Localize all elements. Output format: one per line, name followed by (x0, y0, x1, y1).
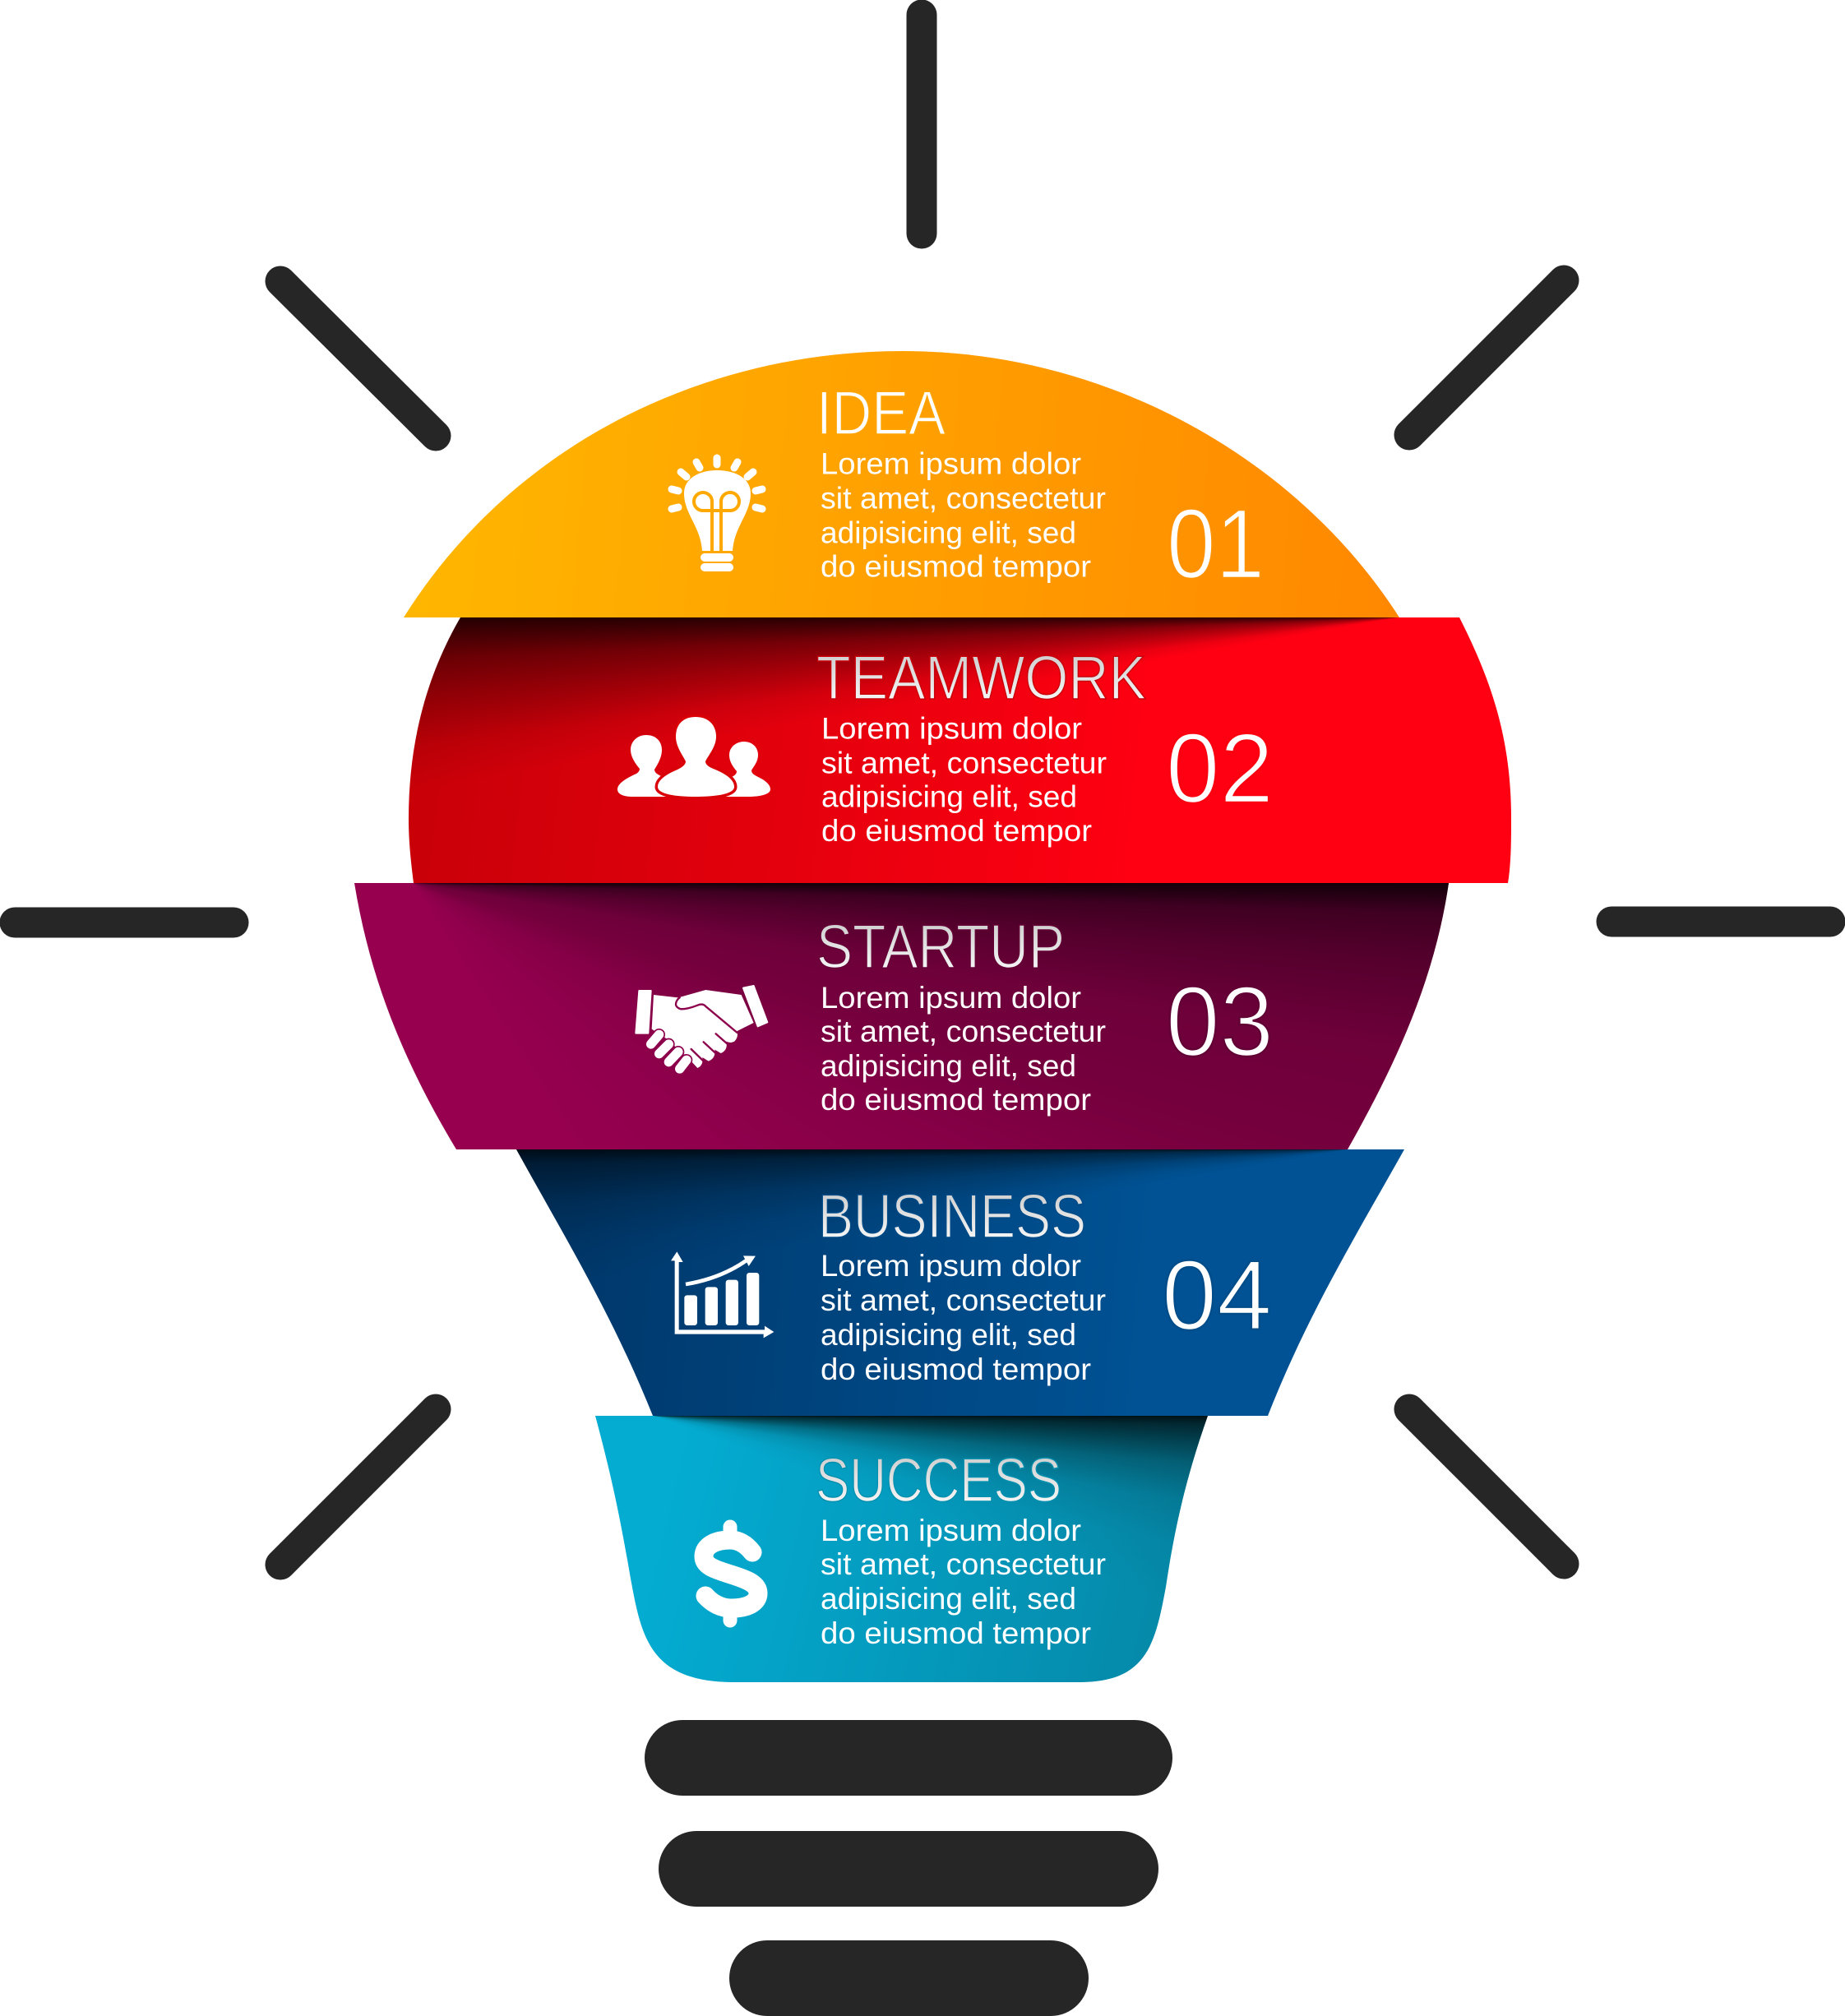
text block: startup (821, 981, 1106, 1117)
text block: success: adipisicing elit, sed (821, 1582, 1076, 1616)
text block: success: Lorem ipsum dolor (821, 1514, 1081, 1547)
text block: business (821, 1249, 1106, 1386)
text block: teamwork (821, 712, 1107, 848)
text block: teamwork: adipisicing elit, sed (821, 779, 1077, 814)
icon: dollar (704, 1527, 758, 1621)
text block: business: Lorem ipsum dolor (821, 1249, 1081, 1283)
heading: business: BUSINESS (818, 1181, 1086, 1251)
text block: idea: sit amet, consectetur (821, 482, 1106, 515)
heading: success: SUCCESS (816, 1445, 1061, 1514)
heading: idea: IDEA (816, 378, 946, 447)
text block: success (821, 1514, 1106, 1650)
text block: startup: sit amet, consectetur (821, 1015, 1106, 1048)
icon: growth chart (671, 1251, 774, 1338)
panel: 04 business (516, 1149, 1404, 1416)
number 01: 01 (1167, 488, 1265, 599)
icon: handshake (636, 986, 767, 1069)
text block: idea: adipisicing elit, sed (821, 516, 1076, 549)
text block: startup: Lorem ipsum dolor (821, 981, 1081, 1015)
text block: teamwork: sit amet, consectetur (821, 747, 1107, 779)
text block: teamwork: do eiusmod tempor (821, 814, 1092, 848)
text block: business: do eiusmod tempor (821, 1352, 1091, 1386)
panel: 05 success (595, 1416, 1208, 1682)
panel: 01 idea (404, 351, 1399, 617)
text block: startup: adipisicing elit, sed (821, 1049, 1076, 1083)
heading: startup: STARTUP (816, 912, 1065, 981)
text block: startup: do eiusmod tempor (821, 1083, 1091, 1117)
heading: teamwork: TEAMWORK (816, 643, 1146, 712)
text block: business: sit amet, consectetur (821, 1283, 1106, 1317)
text block: idea (821, 447, 1106, 584)
number 02: 02 (1166, 712, 1274, 824)
bulb base bars (645, 1720, 1172, 2016)
number 03: 03 (1166, 965, 1274, 1077)
text block: idea: do eiusmod tempor (821, 549, 1091, 584)
text block: business: adipisicing elit, sed (821, 1318, 1076, 1352)
icon: team (617, 717, 770, 797)
text block: teamwork: Lorem ipsum dolor (821, 712, 1082, 745)
text block: success: sit amet, consectetur (821, 1547, 1106, 1581)
text block: idea: Lorem ipsum dolor (821, 447, 1081, 480)
number 04: 04 (1162, 1239, 1272, 1351)
icon: light bulb (672, 458, 762, 571)
panel: 03 startup (354, 883, 1449, 1149)
text block: success: do eiusmod tempor (821, 1616, 1091, 1650)
light rays (15, 15, 1830, 1565)
panel: 02 teamwork (409, 617, 1511, 883)
